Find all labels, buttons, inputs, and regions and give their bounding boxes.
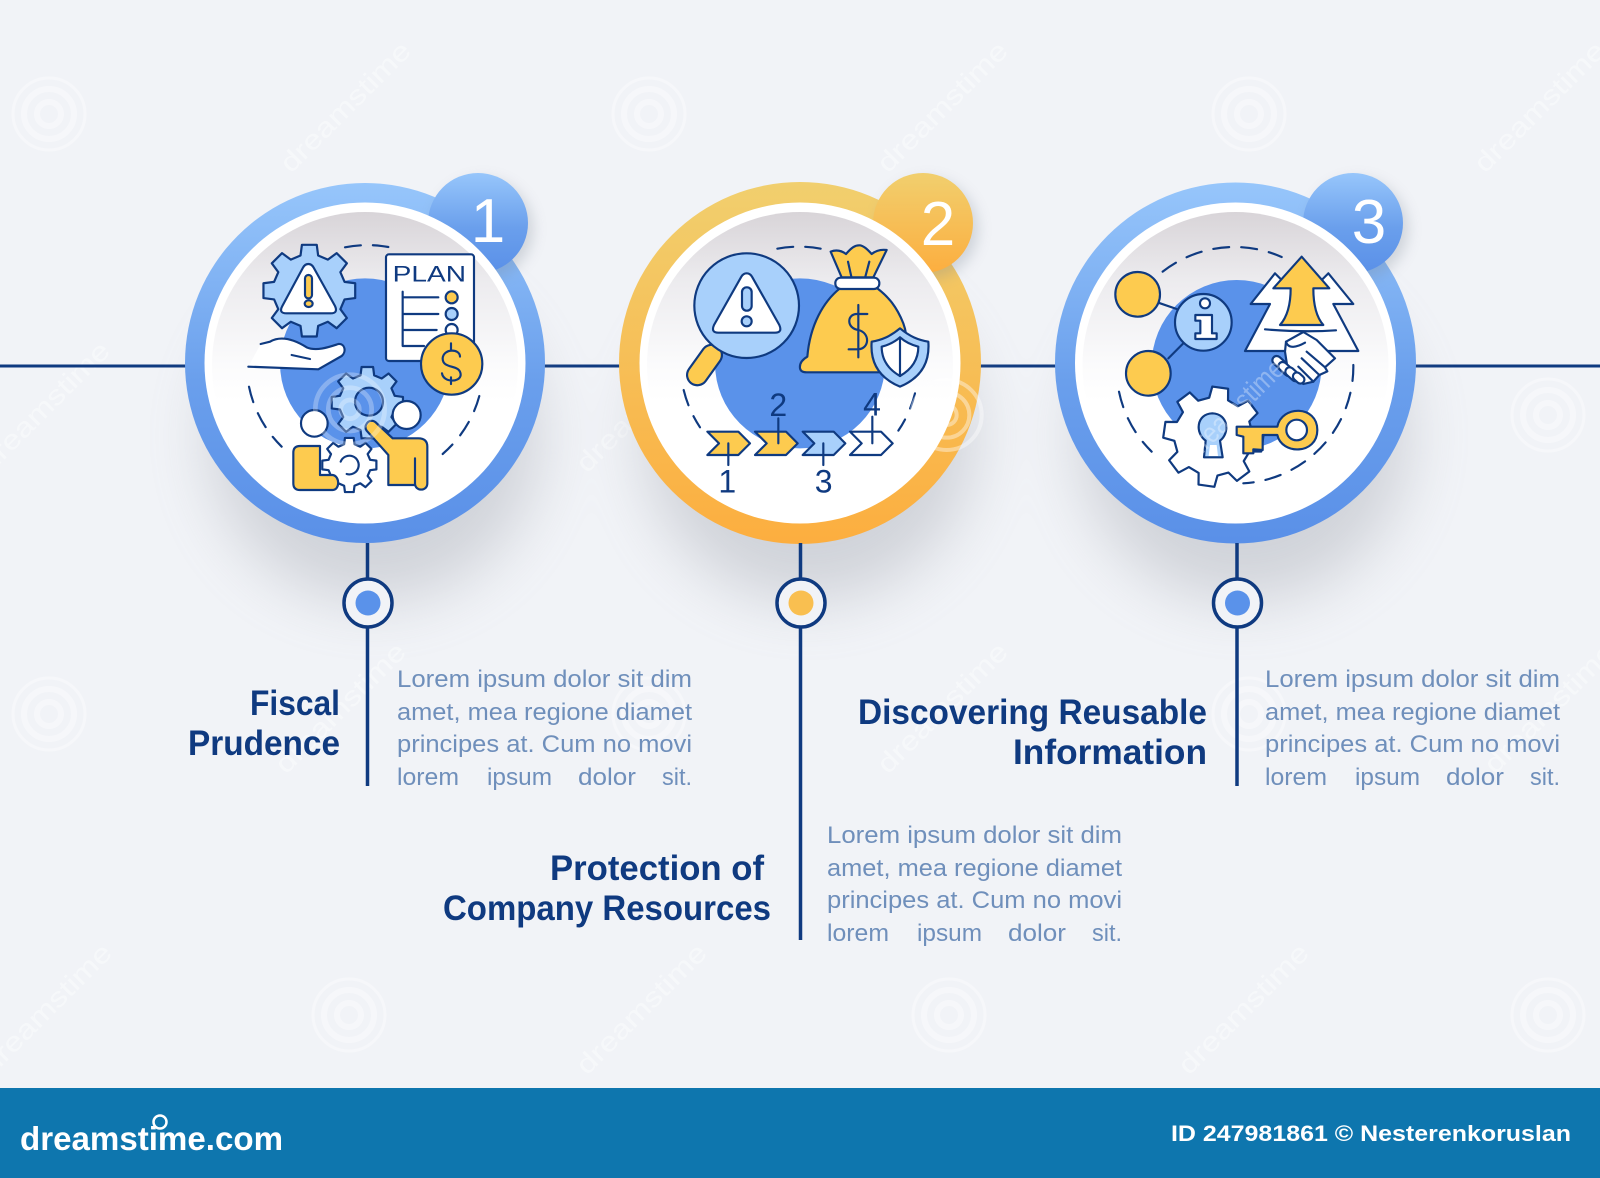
chevron steps: 3 [815, 463, 833, 499]
heading: Fiscal Prudence: Prudence [188, 724, 340, 763]
heading: Fiscal Prudence: Fiscal [250, 684, 340, 723]
body text 2: sit. [1092, 920, 1122, 947]
watermark pattern: dreamstime [1172, 335, 1315, 478]
body text 3: principes at. Cum no movi [1265, 731, 1560, 758]
body text 1: dolor [578, 764, 636, 791]
badge number 1: 1 [471, 187, 505, 256]
inner disc 1 [204, 202, 526, 524]
body text 3 [1265, 666, 1560, 791]
icon: plan, risk gear, teamwork [248, 245, 482, 492]
center gear [332, 367, 403, 438]
badge 2 [873, 173, 973, 273]
watermark pattern: dreamstime [269, 636, 412, 779]
body text 2: ipsum [917, 920, 982, 947]
step 1: circle with icon [185, 173, 545, 543]
badge 1 shadow [433, 179, 533, 279]
right person [365, 401, 427, 490]
watermark spiral [912, 380, 982, 450]
blue blob [1152, 280, 1322, 450]
magnifier [694, 253, 799, 375]
handshake [1271, 332, 1335, 385]
small white gear [322, 438, 376, 492]
watermark pattern: dreamstime [274, 35, 417, 178]
dashed circle arcs [684, 247, 915, 431]
heading: Protection of Company Resources: Company Resources [443, 889, 771, 928]
heading: Protection of Company Resources: Protection of [550, 849, 764, 888]
connector 1 [344, 543, 392, 786]
chevron steps: 4 [863, 386, 881, 422]
body text 1: sit. [662, 764, 692, 791]
connector 3 [1214, 543, 1262, 786]
body text 1: lorem [397, 764, 459, 791]
watermark pattern: dreamstime [570, 937, 713, 1080]
info network [1115, 272, 1232, 396]
badge 2 shadow [878, 179, 978, 279]
plan document: PLAN [393, 262, 466, 287]
watermark pattern: dreamstime [871, 35, 1014, 178]
chevron steps: 2 [769, 387, 787, 423]
badge number 2: 2 [921, 190, 955, 259]
left person [293, 410, 338, 490]
chevron steps [707, 386, 893, 499]
heading: Discovering Reusable Information: Information [1013, 733, 1207, 772]
dashed circle arcs [1119, 247, 1353, 483]
blue blob [715, 278, 885, 448]
step 3: circle with icon [1055, 173, 1416, 544]
hand finger line [292, 355, 310, 359]
badge 3 shadow [1308, 179, 1408, 279]
money bag [800, 245, 907, 372]
warning gear [263, 245, 355, 337]
watermark pattern: dreamstime [1172, 937, 1315, 1080]
watermark text: dreamstime [1179, 353, 1291, 465]
key [1237, 411, 1317, 453]
body text 2 [827, 822, 1122, 947]
body text 1: ipsum [487, 764, 552, 791]
hand [248, 339, 345, 369]
footer credit: ID 247981861 © Nesterenkoruslan [1171, 1121, 1571, 1146]
body text 2: Lorem ipsum dolor sit dim [827, 822, 1122, 849]
gear with keyhole [1157, 381, 1269, 493]
heading: Discovering Reusable Information: Discovering Reusable [858, 693, 1207, 732]
body text 3: amet, mea regione diamet [1265, 699, 1560, 726]
heading: Protection of Company Resources [443, 849, 771, 928]
body text 3: ipsum [1355, 764, 1420, 791]
body text 2: lorem [827, 920, 889, 947]
footer logo: dreamstime.com [20, 1120, 283, 1157]
inner disc 2 [640, 202, 960, 524]
body text 2: principes at. Cum no movi [827, 887, 1122, 914]
badge 1 [428, 173, 528, 273]
body text 2: dolor [1008, 920, 1066, 947]
watermark spiral [315, 375, 385, 444]
watermark pattern: dreamstime [570, 335, 713, 478]
horizontal timeline [0, 364, 1600, 368]
chevron steps: 1 [718, 463, 736, 499]
body text 1: Lorem ipsum dolor sit dim [397, 666, 692, 693]
shield [871, 328, 929, 387]
ring 1 [185, 183, 545, 543]
body text 1 [397, 666, 692, 791]
body text 1: principes at. Cum no movi [397, 731, 692, 758]
growth arrows [1245, 257, 1358, 351]
body text 2: amet, mea regione diamet [827, 855, 1122, 882]
heading: Fiscal Prudence [188, 684, 340, 763]
icon: info network, cooperation arrows, gear key [1115, 247, 1358, 493]
watermark pattern: dreamstime [1478, 636, 1600, 779]
plan document [386, 254, 474, 361]
body text 3: dolor [1446, 764, 1504, 791]
body text 3: lorem [1265, 764, 1327, 791]
inner disc 3 [1075, 202, 1396, 524]
dollar coin [421, 333, 482, 395]
watermark pattern: dreamstime [1468, 35, 1600, 178]
shadows under circles [208, 270, 1410, 602]
ring 3 [1055, 182, 1416, 544]
blue blob [280, 278, 450, 448]
badge number 3: 3 [1352, 188, 1386, 257]
ring 2 [619, 182, 981, 544]
footer bar [0, 1088, 1600, 1178]
dashed circle arcs [249, 245, 479, 454]
step 2: circle with icon [619, 173, 982, 544]
icon: risk search, money bag, steps [684, 245, 982, 499]
badge 3 [1303, 173, 1403, 273]
heading: Discovering Reusable Information [858, 693, 1207, 772]
body text 3: sit. [1530, 764, 1560, 791]
connector 2 [777, 543, 825, 940]
watermark pattern: dreamstime [871, 636, 1014, 779]
body text 1: amet, mea regione diamet [397, 699, 692, 726]
body text 3: Lorem ipsum dolor sit dim [1265, 666, 1560, 693]
